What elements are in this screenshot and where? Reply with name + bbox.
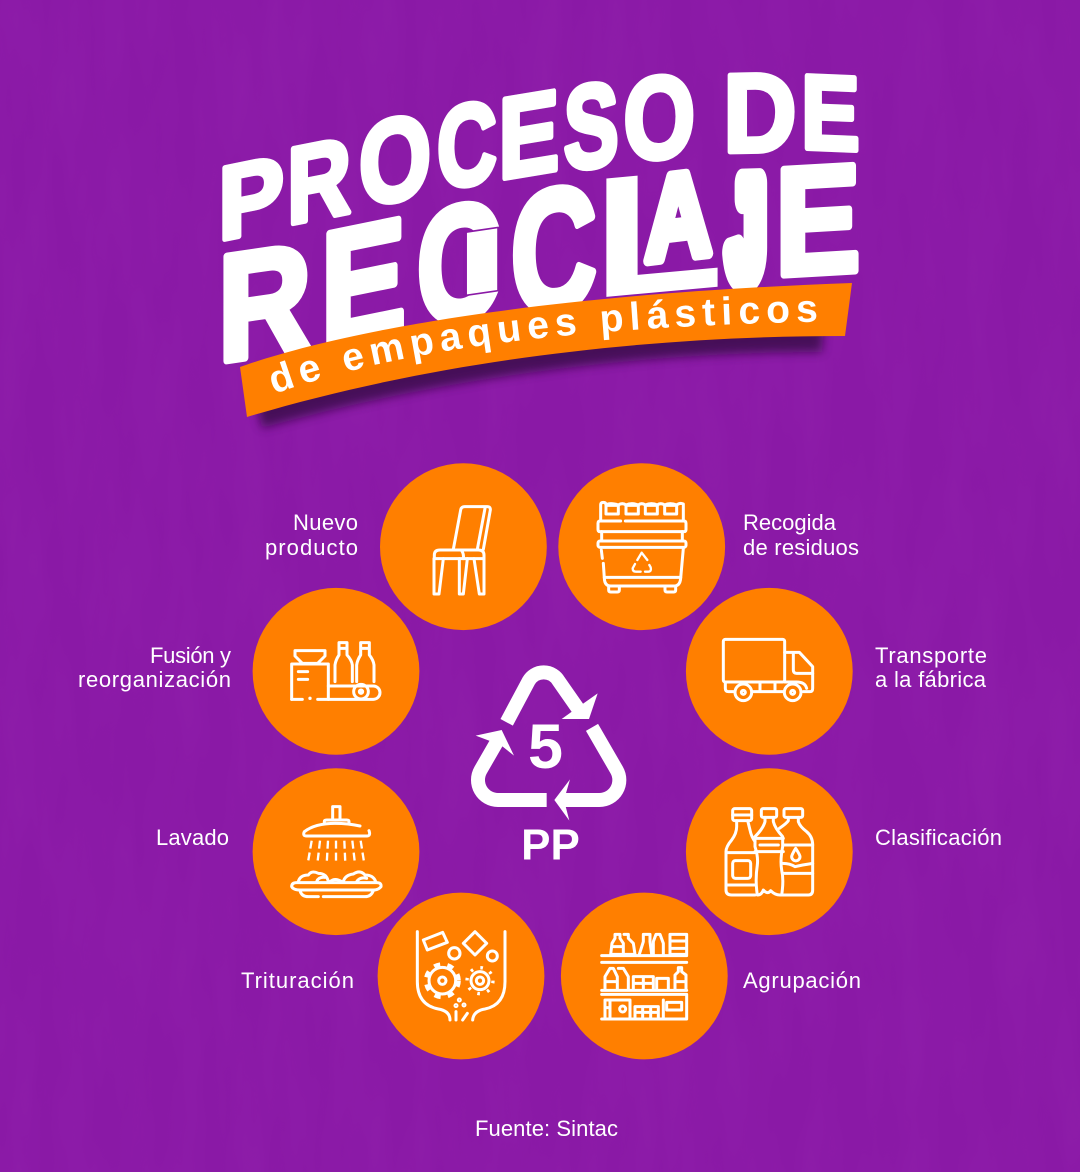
banner shadow	[252, 300, 825, 428]
title line: PROCESO DE: D	[723, 50, 796, 176]
step: Agrupación	[561, 893, 861, 1059]
step: Nuevo producto	[265, 463, 547, 630]
title line: PROCESO DE: C	[437, 77, 497, 214]
title line: PROCESO DE: O	[359, 88, 431, 232]
title line: RECICLAJE: A	[645, 146, 711, 287]
step: Clasificación	[686, 768, 1002, 935]
label: Fusión y	[150, 643, 231, 668]
label: Recogida	[743, 510, 837, 535]
title line: PROCESO DE: E	[801, 52, 860, 173]
title line: RECICLAJE: C	[511, 147, 597, 354]
banner: de empaques plásticos: de empaques plásticos	[271, 296, 816, 392]
title line: RECICLAJE: C	[417, 166, 501, 362]
label PP: PP	[521, 820, 580, 870]
icon: store shelves	[602, 934, 687, 1019]
icon: truck	[723, 639, 813, 701]
label: reorganización	[78, 667, 231, 692]
label: Transporte	[875, 643, 987, 668]
step: Fusión y reorganización	[78, 588, 419, 755]
step: Lavado	[156, 768, 419, 935]
step: Transporte a la fábrica	[686, 588, 987, 755]
icon: bottles	[726, 809, 813, 895]
title line: PROCESO DE: E	[499, 67, 559, 205]
title line: RECICLAJE: L	[592, 130, 724, 335]
icon: recycling arrows	[476, 672, 619, 821]
icon: chair	[434, 507, 490, 594]
label	[265, 510, 358, 560]
title line: RECICLAJE: E	[321, 183, 406, 380]
icon: bottling machine	[292, 643, 380, 700]
number 5: 5	[528, 712, 563, 782]
label: Clasificación	[875, 825, 1002, 850]
title line: RECICLAJE: I	[453, 207, 511, 316]
step: Trituración	[241, 893, 544, 1059]
title line: RECICLAJE: J	[728, 153, 764, 307]
title line: PROCESO DE	[218, 50, 860, 263]
title	[218, 50, 860, 432]
source note: Fuente: Sintac	[475, 1116, 618, 1141]
label: de residuos	[743, 535, 859, 560]
title line: PROCESO DE: O	[623, 51, 695, 186]
step: Recogida de residuos	[558, 463, 859, 630]
recycling code symbol: 5 PP	[476, 672, 619, 870]
title line: RECICLAJE: R	[218, 211, 311, 394]
icon: shredder	[417, 932, 505, 1020]
icon: shower over flakes	[292, 807, 381, 897]
label	[78, 643, 231, 692]
title line: RECICLAJE	[218, 130, 860, 394]
label	[875, 643, 987, 692]
title line: PROCESO DE: P	[218, 133, 284, 263]
label: producto	[265, 535, 358, 560]
label: a la fábrica	[875, 667, 987, 692]
label: Agrupación	[743, 968, 861, 993]
label: Trituración	[241, 968, 354, 993]
label: Nuevo	[293, 510, 358, 535]
title line: PROCESO DE: S	[564, 57, 619, 195]
title line: RECICLAJE: E	[775, 132, 860, 308]
label	[743, 510, 859, 560]
label: Lavado	[156, 825, 229, 850]
icon: dumpster	[598, 502, 686, 592]
title line: PROCESO DE: R	[287, 115, 351, 248]
